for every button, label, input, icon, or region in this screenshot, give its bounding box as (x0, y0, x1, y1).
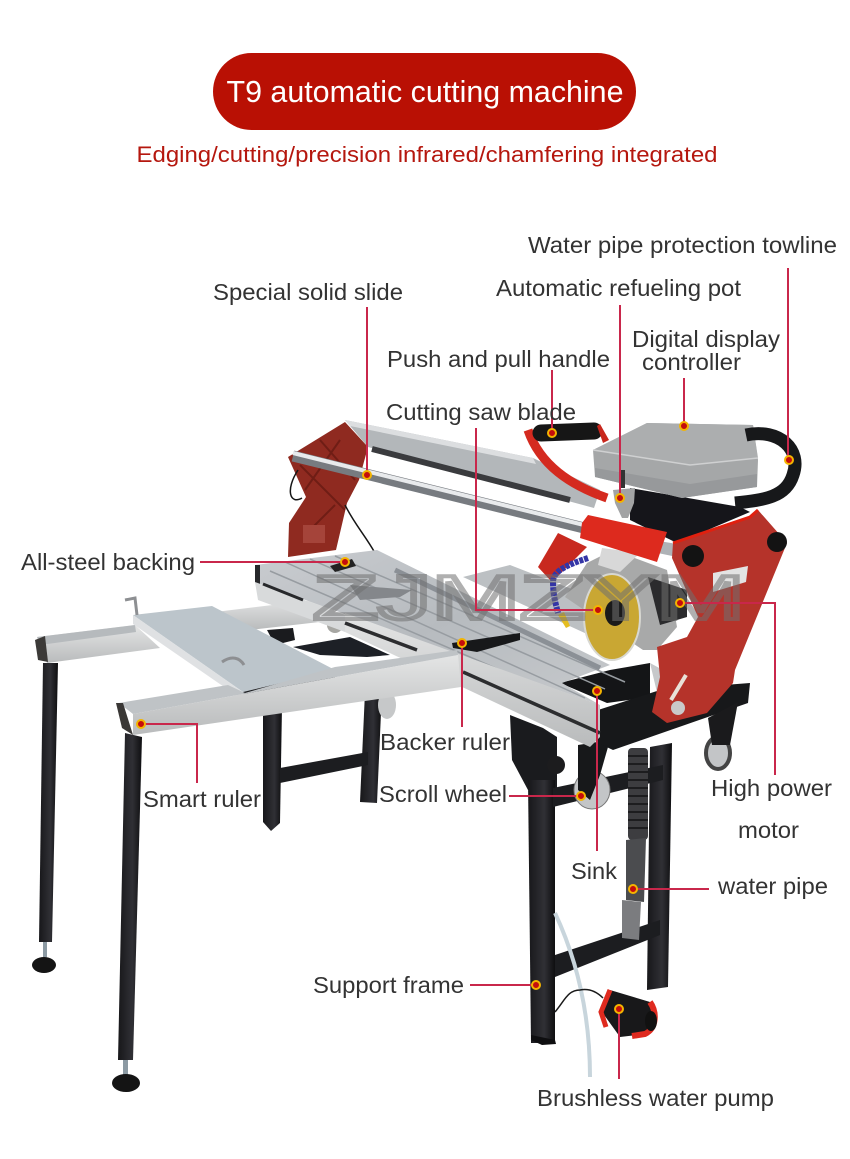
callout: sink (571, 687, 618, 884)
chrome rod (293, 453, 677, 557)
table surface (255, 550, 625, 747)
callout: automatic refueling pot (496, 275, 742, 502)
title pill: T9 automatic cutting machine (226, 74, 624, 109)
callout: cutting saw blade (386, 399, 602, 614)
callout: sink: Sink (571, 858, 618, 884)
sliding table (125, 598, 335, 700)
yellow saw blade (584, 574, 640, 660)
push and pull handle (528, 424, 609, 498)
callout: backer ruler: Backer ruler (380, 729, 510, 755)
callout: automatic refueling pot: Automatic refueling pot (496, 275, 742, 301)
front extension rail (116, 650, 461, 735)
callout: water pipe (629, 873, 828, 899)
callout: water pipe: water pipe (717, 873, 828, 899)
callout: push and pull handle (387, 346, 610, 437)
sink and base (560, 663, 750, 769)
water pump (601, 990, 657, 1037)
callout: digital display controller: Digital display (632, 326, 781, 352)
callout: cutting saw blade: Cutting saw blade (386, 399, 576, 425)
callout: digital display controller: controller (642, 349, 741, 375)
ZJMZYM watermark: ZJMZYM (313, 564, 745, 633)
rear support stand (263, 628, 396, 831)
front extension leg (112, 733, 142, 1092)
callout: special solid slide (213, 279, 403, 479)
callout: brushless water pump (537, 1005, 774, 1111)
callout: smart ruler: Smart ruler (143, 786, 261, 812)
water pipe protection towline (735, 434, 795, 503)
left gantry bracket (288, 422, 375, 557)
water pipe (622, 748, 648, 940)
digital display controller box (593, 423, 758, 498)
red carriage cylinder (580, 515, 667, 562)
blade guard (565, 548, 687, 650)
black knobs (682, 532, 787, 567)
callout: smart ruler (137, 720, 261, 812)
rear extension leg (32, 663, 58, 973)
callout: brushless water pump: Brushless water pump (537, 1085, 774, 1111)
callout: high power motor: motor (738, 817, 799, 843)
rear extension rail (35, 598, 343, 663)
title pill (213, 53, 636, 130)
slide rails (345, 420, 600, 508)
callout: special solid slide: Special solid slide (213, 279, 403, 305)
callout: high power motor (676, 599, 832, 843)
scroll wheel (547, 740, 610, 809)
callout: scroll wheel: Scroll wheel (379, 781, 507, 807)
callout: backer ruler (380, 639, 510, 755)
red carriage casing (538, 533, 587, 580)
red side plate (652, 510, 787, 723)
callout: support frame: Support frame (313, 972, 464, 998)
callout: digital display controller (632, 326, 781, 430)
subtitle: Edging/cutting/precision infrared/chamfering integrated (136, 142, 718, 167)
automatic refueling pot (613, 470, 635, 518)
motor body (630, 488, 750, 543)
callout: push and pull handle: Push and pull handle (387, 346, 610, 372)
machine illustration (32, 420, 795, 1092)
clear tube and wire (555, 913, 603, 1077)
blue coolant hose (553, 558, 588, 628)
callout: water pipe protection towline: Water pipe protection towline (528, 232, 837, 258)
callout: support frame (313, 972, 540, 998)
callout: all-steel backing (21, 549, 349, 575)
callout: water pipe protection towline (528, 232, 837, 464)
callout: scroll wheel (379, 781, 585, 807)
callout: high power motor: High power (711, 775, 832, 801)
callout: all-steel backing: All-steel backing (21, 549, 195, 575)
main frame leg set (510, 715, 672, 1045)
